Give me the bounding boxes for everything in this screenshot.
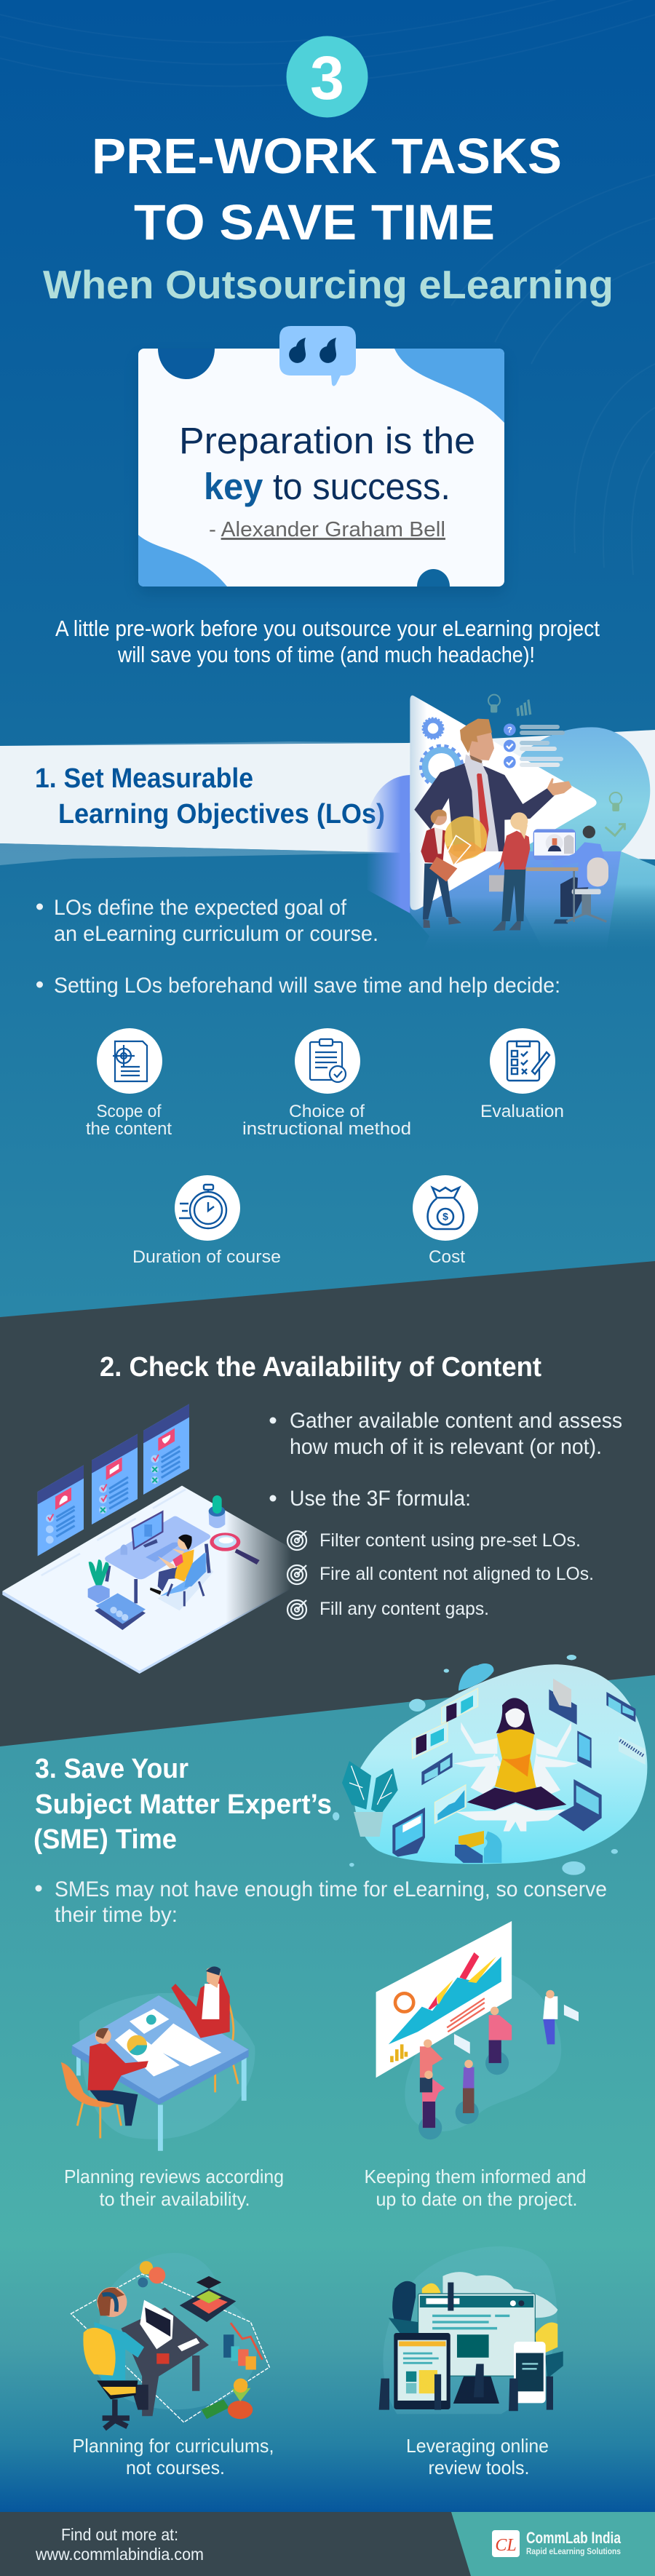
- caption: [73, 2435, 274, 2478]
- panel: section 2 dark background: [0, 1261, 655, 1761]
- bullets: section 2: [269, 1409, 622, 1511]
- section 2 heading: 2. Check the Availability of Content: [100, 1352, 541, 1383]
- floating panels: [38, 1404, 189, 1556]
- section 3 heading: [33, 1754, 332, 1855]
- section 1 heading band: [0, 730, 655, 865]
- illustration: multitasking meditating woman: [333, 1655, 647, 1875]
- small floating shapes: [333, 1655, 618, 1875]
- main presenter: [414, 719, 572, 851]
- desk: [105, 1511, 213, 1610]
- footer link text: www.commlabindia.com: [35, 2545, 204, 2564]
- icon item: cost: $: [442, 1211, 448, 1223]
- footer link text: Find out more at:: [61, 2525, 178, 2544]
- play triangle: [410, 696, 597, 910]
- section 1 heading band: 1. Set Measurable: [35, 763, 253, 794]
- bullets: section 1: an eLearning curriculum or course.: [54, 922, 378, 946]
- intro text: A little pre-work before you outsource your eLearning project: [55, 616, 600, 641]
- section 3 heading: Subject Matter Expert’s: [35, 1789, 332, 1820]
- woman: [453, 1698, 577, 1832]
- quote card: [138, 326, 504, 594]
- desk worker: [526, 826, 608, 923]
- section 3 heading: (SME) Time: [33, 1824, 177, 1855]
- magnifier: [210, 1533, 260, 1565]
- logo: [492, 2529, 622, 2557]
- panel: section 3 teal background: [0, 1675, 655, 2512]
- bullet: section 3: SMEs may not have enough time for eLearning, so conserve: [55, 1877, 607, 1901]
- illustration: keeping informed with data board: [376, 1921, 579, 2139]
- quote text: [179, 420, 475, 541]
- bullets: section 2: Use the 3F formula:: [290, 1487, 471, 1511]
- icon item: cost: [413, 1175, 478, 1267]
- logo: CommLab India: [526, 2529, 622, 2547]
- intro text: [55, 616, 600, 667]
- light bulb: [429, 816, 487, 882]
- illustration: presenter and team on play button: [359, 695, 655, 951]
- 3F list with target icons: Filter content using pre-set LOs.: [319, 1530, 581, 1551]
- caption: up to date on the project.: [376, 2188, 578, 2210]
- person at desk: [150, 1535, 206, 1606]
- intro text: will save you tons of time (and much headache)!: [117, 642, 535, 667]
- icon item: duration of course: [132, 1175, 281, 1267]
- caption: not courses.: [126, 2457, 225, 2478]
- icon item: choice of instructional method: [242, 1028, 411, 1139]
- icon item: scope of the content: the content: [86, 1119, 172, 1139]
- icon item: choice of instructional method: instructional method: [242, 1119, 411, 1139]
- checklist: [504, 723, 565, 768]
- woman with briefcase: [489, 812, 530, 931]
- icon item: scope of the content: [86, 1028, 172, 1139]
- quote text: key to success.: [204, 466, 450, 507]
- background: top blue section: [0, 0, 655, 1332]
- title: PRE-WORK TASKS: [92, 128, 562, 184]
- icon: quote bubble: [279, 326, 356, 386]
- stacked books: [95, 1593, 146, 1630]
- bullets: section 2: Gather available content and assess: [290, 1409, 622, 1433]
- caption: review tools.: [428, 2457, 530, 2478]
- pie: [455, 1831, 502, 1863]
- 3F list with target icons: Fill any content gaps.: [319, 1599, 489, 1619]
- caption: Leveraging online: [406, 2435, 549, 2457]
- bullets: section 2: how much of it is relevant (or not).: [290, 1435, 602, 1459]
- illustration: isometric workspace: [2, 1404, 291, 1674]
- bullet: section 3: their time by:: [55, 1903, 178, 1927]
- woman with bulb: [421, 810, 461, 928]
- illustration: online review tools on devices: [379, 2246, 563, 2414]
- logo: Rapid eLearning Solutions: [526, 2548, 621, 2556]
- plant with pot: [342, 1761, 398, 1837]
- bullets: section 1: Setting LOs beforehand will save time and help decide:: [54, 974, 560, 998]
- caption: to their availability.: [99, 2188, 250, 2210]
- icon item: choice of instructional method: Choice of: [289, 1102, 365, 1121]
- subtitle: When Outsourcing eLearning: [43, 262, 614, 307]
- bullets: section 1: [36, 896, 560, 998]
- title: [92, 128, 562, 250]
- section 3 heading: 3. Save Your: [35, 1754, 188, 1784]
- number badge: 3: [310, 44, 344, 112]
- 3F list with target icons: Fire all content not aligned to LOs.: [319, 1564, 594, 1584]
- 3F list with target icons: [287, 1530, 594, 1619]
- icon: green bulb and arrow: [606, 792, 624, 835]
- caption: Keeping them informed and: [364, 2166, 587, 2187]
- floating devices: [392, 1679, 646, 1857]
- section 1 heading band: Learning Objectives (LOs): [58, 799, 385, 830]
- caption: [64, 2166, 284, 2210]
- icon item: evaluation: Evaluation: [480, 1102, 564, 1121]
- icon item: duration of course: Duration of course: [132, 1247, 281, 1267]
- caption: [406, 2435, 549, 2478]
- footer: [0, 2512, 655, 2576]
- caption: Planning for curriculums,: [73, 2435, 274, 2457]
- footer link text: [35, 2525, 204, 2564]
- icon item: cost: Cost: [429, 1247, 465, 1267]
- icon item: scope of the content: Scope of: [96, 1102, 162, 1121]
- icon: faint bulb and bars: [488, 695, 531, 716]
- cactus pot: [209, 1495, 225, 1528]
- illustration: planning reviews at table: [61, 1966, 255, 2151]
- icon: gears: [421, 718, 462, 787]
- checklist: ?: [507, 726, 512, 735]
- logo: CL: [495, 2536, 517, 2555]
- number badge: [287, 36, 368, 118]
- quote text: Preparation is the: [179, 420, 475, 461]
- title: TO SAVE TIME: [134, 194, 495, 250]
- plant: [88, 1559, 110, 1603]
- bullet: section 3: [35, 1877, 607, 1927]
- caption: [364, 2166, 587, 2210]
- caption: Planning reviews according: [64, 2166, 284, 2187]
- bullets: section 1: LOs define the expected goal of: [54, 896, 347, 920]
- quote text: - Alexander Graham Bell: [209, 518, 445, 541]
- icon item: evaluation: [480, 1028, 564, 1121]
- illustration: planning for curriculums: [71, 2253, 269, 2428]
